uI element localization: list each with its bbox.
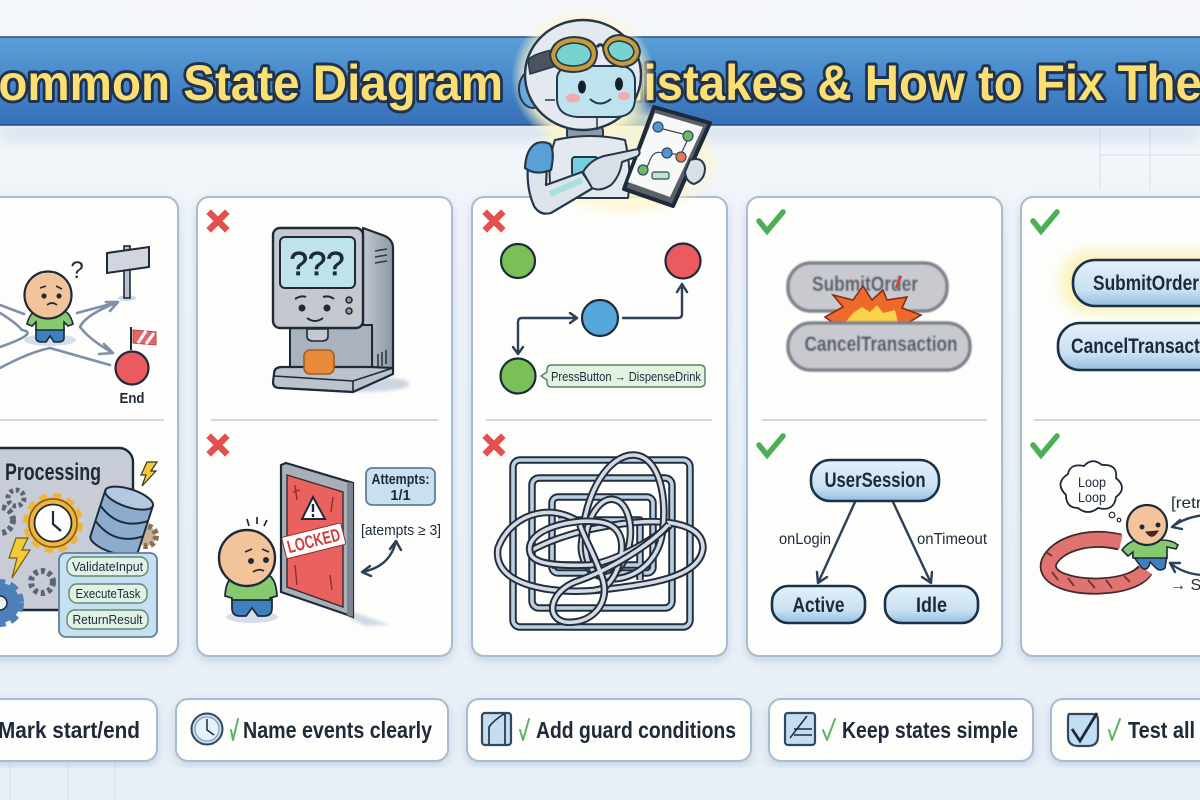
panel 4: blurred labels and clear hierarchy [747,197,1002,656]
bronze gear [136,526,156,546]
cross mark [211,214,225,228]
icon: guard box [482,713,511,745]
action list: ValidateInput [72,559,143,574]
confused vending machine [273,228,410,392]
lightning bolts [9,462,157,578]
clear state hierarchy: Active [792,594,844,617]
footer tip: keep states simple [769,699,1033,761]
transition note: PressButton → DispenseDrink [551,370,702,384]
panel 3: unreachable states and spaghetti [472,197,727,656]
wandering person with no end state [0,257,118,368]
robot hands [583,149,705,189]
clear state hierarchy: UserSession [824,469,926,492]
check mark [759,436,783,455]
blurred colliding labels: SubmitOrder [812,273,918,296]
action list [59,553,157,637]
clear state hierarchy: onLogin [779,531,831,548]
panel 1: missing start and end, overloaded state [0,197,178,656]
footer tip: test all [1051,699,1200,761]
panel 5: clear labels and safe loop [1021,197,1200,656]
clear state hierarchy: onTimeout [917,531,988,548]
title text [0,55,1200,111]
title banner [0,37,1200,140]
yellow glow [511,8,723,218]
tablet with mini state diagram [624,107,710,206]
confused vending machine: ??? [289,245,345,282]
guard label: [atempts ≥ 3] [361,523,441,539]
blurred colliding labels [788,263,970,370]
clear state hierarchy: Idle [916,594,947,617]
attempts counter: 1/1 [390,488,411,504]
thought cloud: Loop [1078,474,1106,490]
processing state box [0,448,157,637]
blurred colliding labels: CancelTransaction [804,333,958,356]
footer tip: name events clearly [176,699,448,761]
footer tip: add guard conditions: Add guard conditions [536,717,736,743]
clear state hierarchy [772,460,988,623]
footer tip: mark start/end [0,699,157,761]
processing state box: Processing [5,459,101,486]
thought cloud: Loop [1078,489,1106,505]
disconnected state nodes [500,244,700,394]
robot arm and shoulder [525,142,593,214]
spaghetti tangle [498,455,703,627]
attempts counter: Attempts: [372,472,430,488]
attempts counter [366,468,435,505]
locked red door: LOCKED [285,525,342,557]
icon: clock [192,714,222,744]
check mark [1033,436,1057,455]
wandering person with no end state: ? [70,257,84,284]
robot neck and torso [550,126,629,198]
goggles [550,35,640,72]
footer tip: add guard conditions [467,699,751,761]
green tick [1109,719,1120,740]
footer tip: mark start/end: Mark start/end [0,717,140,743]
green tick [520,719,529,740]
footer tip: name events clearly: Name events clearly [243,717,432,743]
transition note [541,365,705,387]
robot mascot with tablet [511,8,723,218]
clock gear [27,497,79,549]
thought cloud [1060,461,1122,522]
end state with flag: End [120,391,144,407]
robot head [519,20,641,130]
footer tip: keep states simple: Keep states simple [842,717,1018,743]
panel 2: vending machine and locked door [197,197,452,656]
cross mark [487,214,501,228]
end state with flag [116,327,156,407]
icon: simple state box [785,713,815,745]
database [88,482,156,560]
clearly separated labels [1058,252,1200,370]
cross mark [487,438,501,452]
action list: ExecuteTask [76,586,141,601]
happy person [1122,505,1178,570]
green tick [231,719,238,740]
check mark [759,212,783,231]
face [566,78,630,104]
retry guard and arrows [1170,495,1200,594]
curved guard arrow [362,541,401,576]
green tick [823,719,835,740]
cross mark [211,438,225,452]
action list: ReturnResult [72,612,143,627]
confused person by door [219,517,278,623]
blue gear [0,583,20,623]
explosion [825,276,921,323]
blank signpost [107,246,149,301]
icon: checkbox [1068,713,1098,746]
red loop ring [1046,539,1146,588]
check mark [1033,212,1057,231]
locked red door [281,463,390,626]
